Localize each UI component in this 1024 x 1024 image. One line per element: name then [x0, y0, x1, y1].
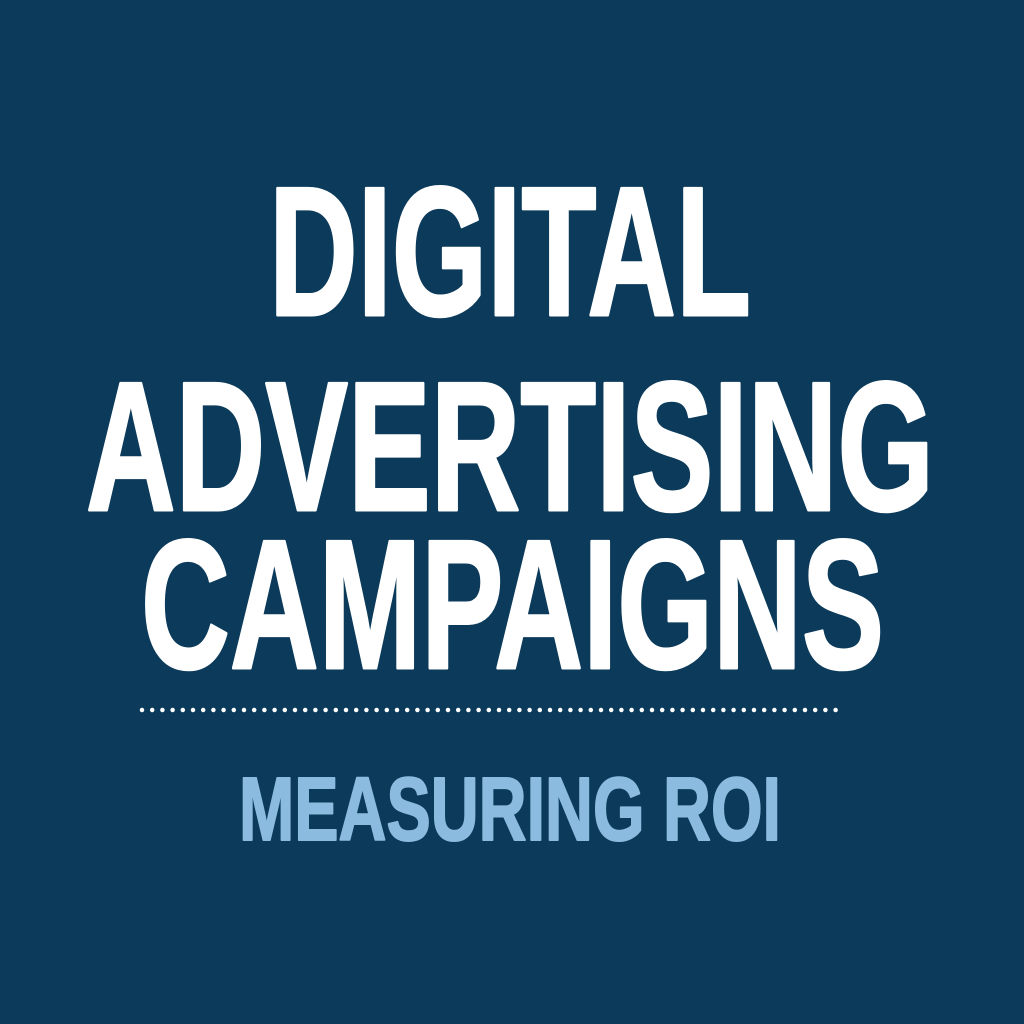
- title: [86, 148, 934, 707]
- subtitle: MEASURING ROI: [239, 760, 781, 860]
- dotted divider: [142, 708, 838, 712]
- title line 1: DIGITAL: [269, 148, 751, 354]
